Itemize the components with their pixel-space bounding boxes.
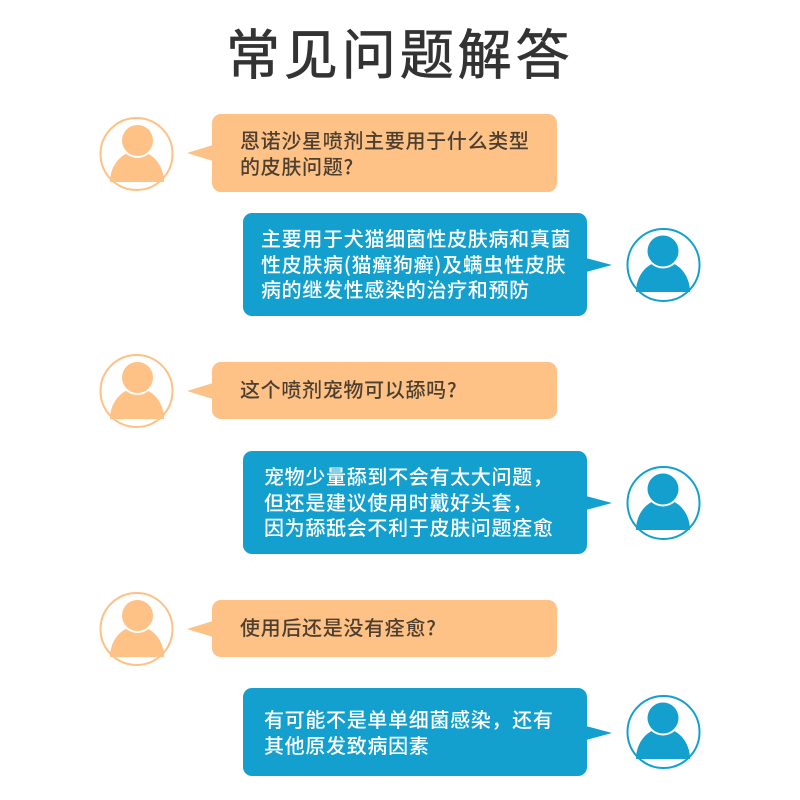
question bubble 3 — [212, 600, 557, 657]
title: 常见问题解答 — [226, 26, 573, 86]
avatar: answer 3 — [626, 695, 700, 769]
avatar: question 3 — [100, 592, 174, 666]
answer bubble 3: 其他原发致病因素 — [264, 736, 429, 758]
answer bubble 1: 病的继发性感染的治疗和预防 — [261, 280, 530, 302]
question bubble 1 — [212, 114, 557, 192]
answer bubble 2: 宠物少量舔到不会有太大问题， — [264, 467, 554, 489]
answer bubble 1: 主要用于犬猫细菌性皮肤病和真菌 — [261, 229, 571, 251]
answer bubble 2 — [243, 451, 587, 554]
question bubble 1: 恩诺沙星喷剂主要用于什么类型 — [240, 131, 530, 153]
answer bubble 1: 性皮肤病(猫癣狗癣)及螨虫性皮肤 — [261, 248, 566, 278]
answer bubble 2: 因为舔舐会不利于皮肤问题痊愈 — [264, 518, 554, 540]
avatar: question 2 — [100, 354, 174, 428]
answer bubble 1 — [243, 213, 587, 316]
avatar: question 1 — [100, 117, 174, 191]
avatar: answer 1 — [626, 228, 700, 302]
question bubble 3: 使用后还是没有痊愈? — [240, 612, 437, 641]
answer bubble 2: 但还是建议使用时戴好头套， — [264, 492, 533, 514]
answer bubble 3: 有可能不是单单细菌感染，还有 — [264, 710, 554, 732]
answer bubble 3 — [243, 688, 587, 776]
avatar: answer 2 — [626, 466, 700, 540]
question bubble 2 — [212, 362, 557, 419]
question bubble 1: 的皮肤问题? — [240, 151, 354, 180]
question bubble 2: 这个喷剂宠物可以舔吗? — [240, 374, 457, 403]
